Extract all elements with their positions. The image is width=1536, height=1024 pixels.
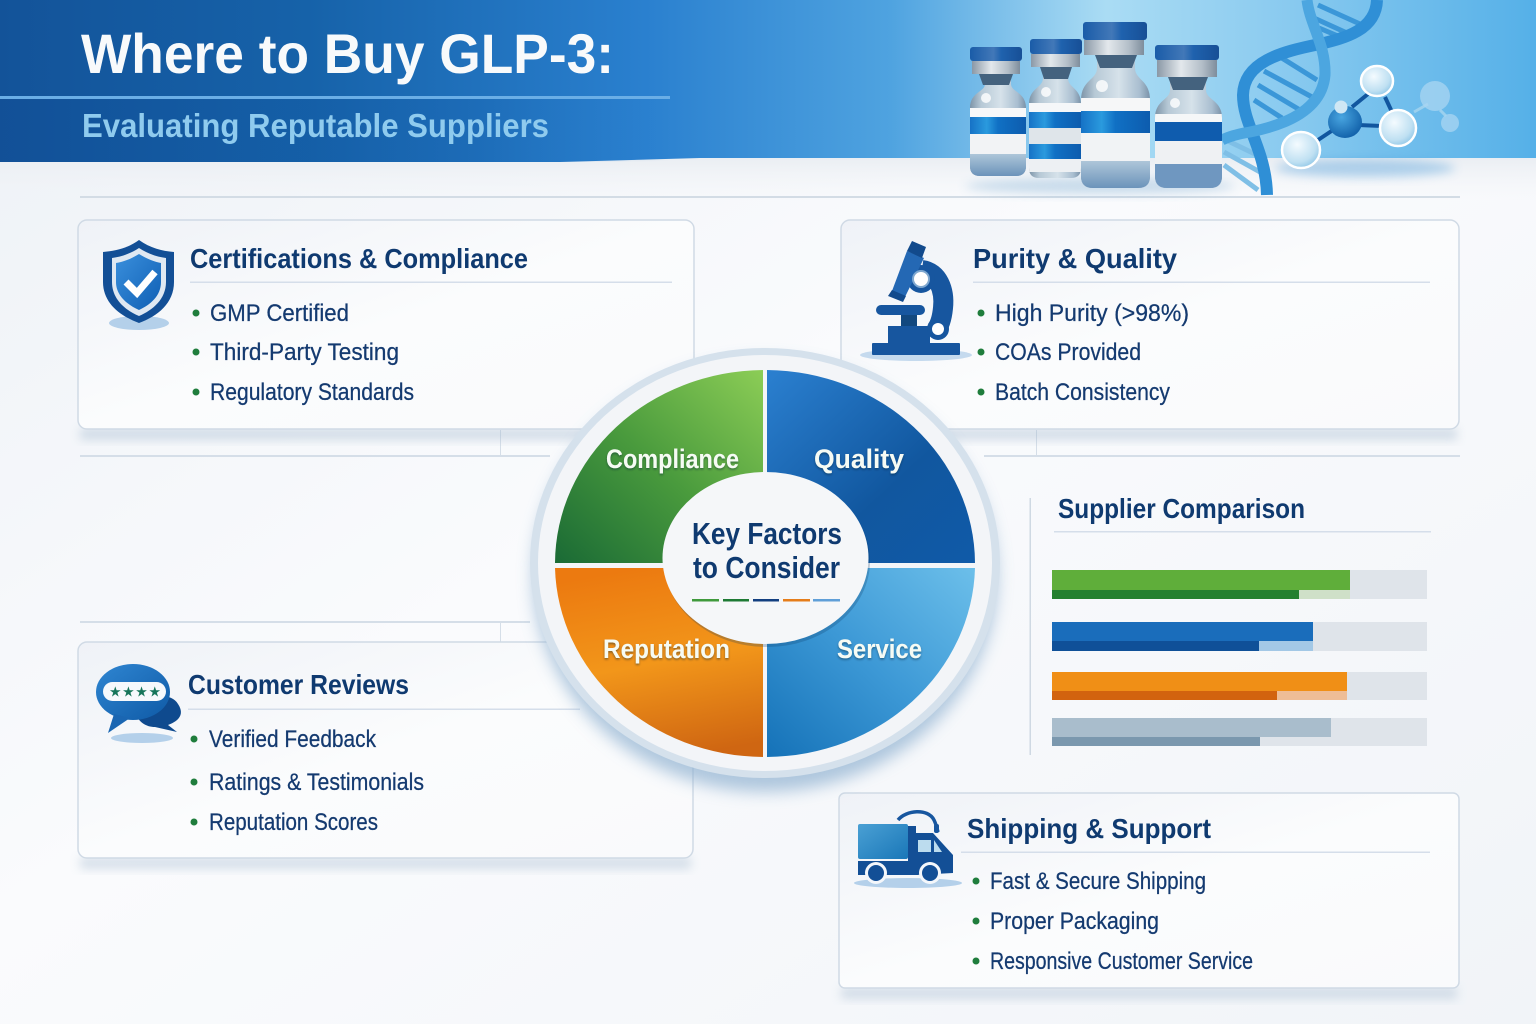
center hub: Key Factors (692, 516, 842, 551)
vial 1 (970, 47, 1026, 176)
list: Reputation Scores (209, 809, 378, 836)
heading: Certifications & Compliance (190, 243, 528, 274)
connector lines (80, 430, 1460, 642)
segment: service: Service (837, 634, 922, 664)
bar: orange (1052, 672, 1427, 700)
list: Batch Consistency (995, 379, 1170, 406)
panel: shipping and support (839, 793, 1459, 999)
list: Fast & Secure Shipping (990, 868, 1206, 895)
icon: speech bubbles (96, 664, 181, 743)
icon: speech bubbles: ★★★★ (109, 684, 161, 700)
icon: shield (103, 240, 174, 330)
header banner (0, 0, 1536, 162)
heading: Customer Reviews (188, 669, 409, 700)
icon: microscope (860, 241, 972, 361)
panel: supplier comparison (1030, 493, 1431, 755)
list (190, 726, 424, 836)
subtitle: Evaluating Reputable Suppliers (82, 107, 549, 144)
list (972, 868, 1253, 975)
segment: compliance (555, 370, 763, 563)
panel: certifications and compliance (78, 220, 694, 440)
illustration: vials, DNA and molecule (965, 0, 1459, 195)
center hub (662, 472, 870, 647)
segment: quality: Quality (814, 444, 904, 474)
shelf line (80, 196, 1460, 198)
bar: blue (1052, 622, 1427, 651)
DNA helix (1222, 0, 1377, 195)
list: Ratings & Testimonials (209, 769, 424, 796)
segment: compliance: Compliance (606, 444, 739, 474)
vial 3 (1081, 22, 1150, 188)
segment: reputation (555, 568, 763, 757)
title: Where to Buy GLP-3: (81, 22, 614, 85)
list: GMP Certified (210, 300, 349, 327)
segment: service (767, 568, 975, 757)
list: COAs Provided (995, 339, 1141, 366)
list: Third-Party Testing (210, 339, 399, 366)
molecule (1282, 66, 1459, 168)
panel: purity and quality (841, 220, 1459, 440)
bar: green (1052, 570, 1427, 599)
list: Responsive Customer Service (990, 948, 1253, 975)
list: Verified Feedback (209, 726, 377, 753)
bar chart (1052, 570, 1427, 746)
list (978, 300, 1189, 406)
heading: Supplier Comparison (1058, 493, 1305, 524)
segment: quality (767, 370, 975, 563)
bar: grey (1052, 718, 1427, 746)
list: Proper Packaging (990, 908, 1159, 935)
panel: customer reviews (78, 642, 693, 869)
list (192, 300, 414, 406)
vial 2 (1029, 39, 1082, 178)
central wheel: key factors (530, 348, 1000, 792)
heading: Purity & Quality (973, 243, 1177, 274)
icon: delivery truck (854, 812, 962, 888)
list: High Purity (>98%) (995, 300, 1189, 327)
center hub: to Consider (693, 550, 840, 585)
vial 4 (1155, 45, 1222, 188)
segment: reputation: Reputation (603, 634, 730, 664)
heading: Shipping & Support (967, 813, 1211, 844)
list: Regulatory Standards (210, 379, 414, 406)
